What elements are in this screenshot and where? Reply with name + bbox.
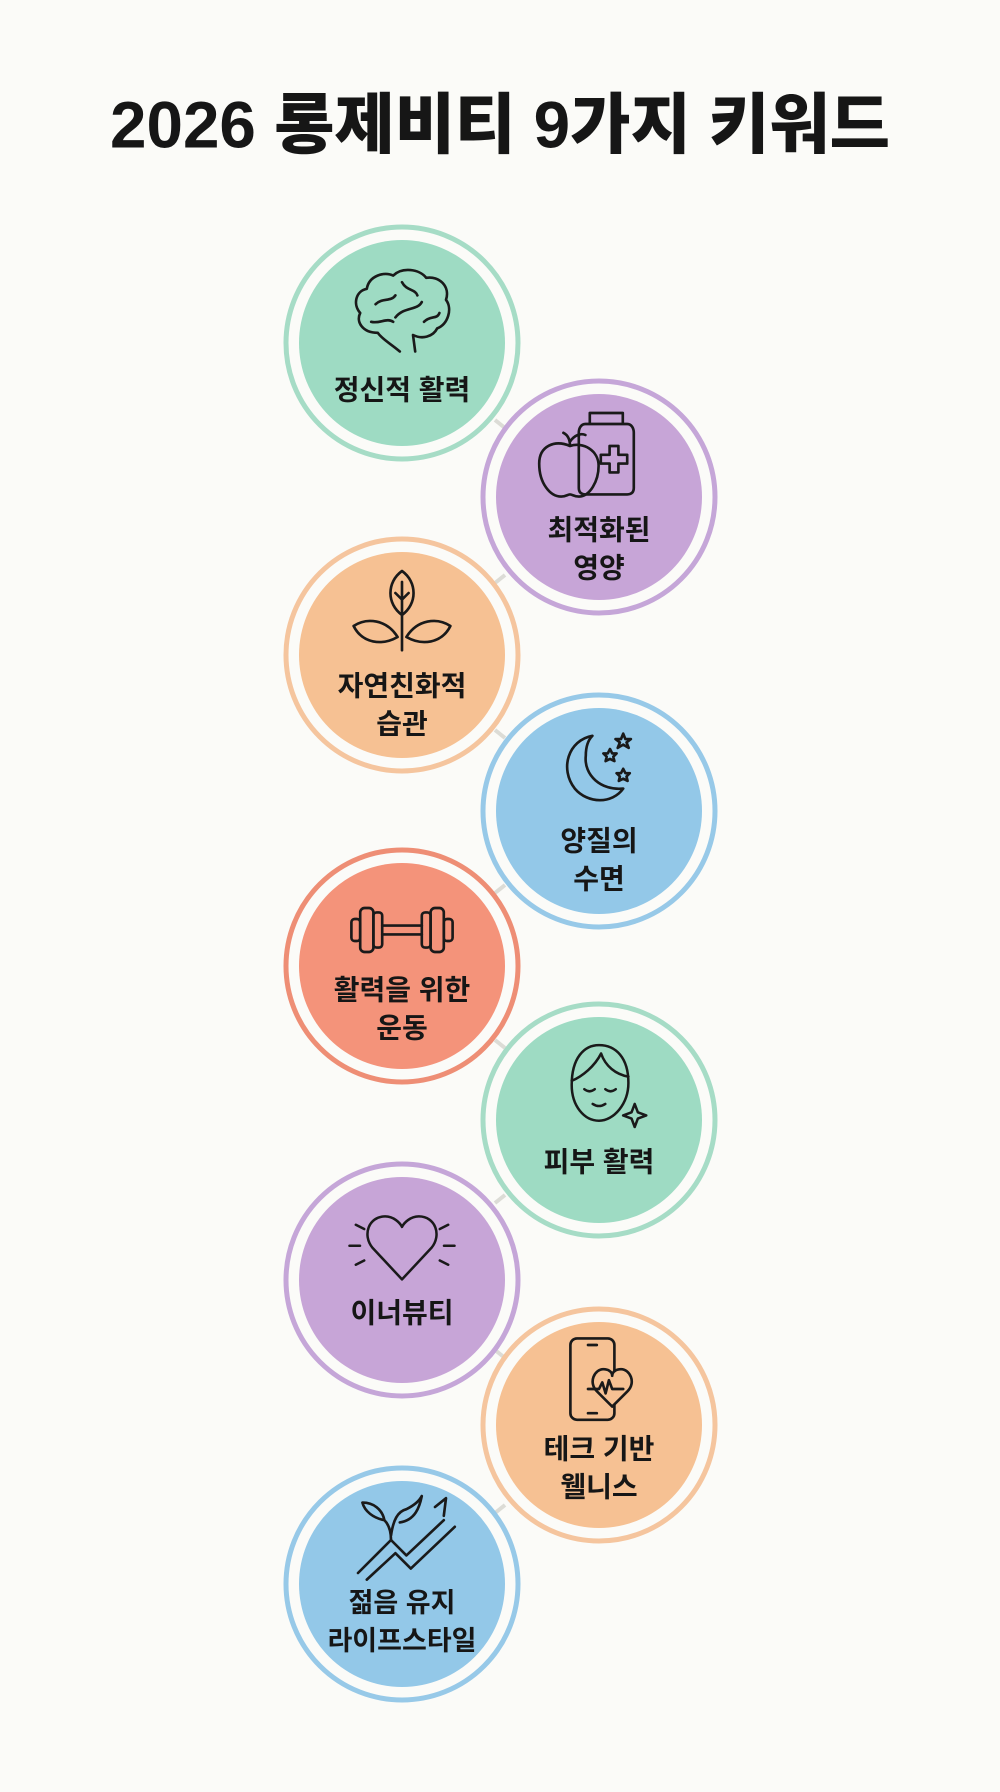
circle 9: 젊음 유지 라이프스타일: 라이프스타일 bbox=[327, 1626, 477, 1656]
label: 테크 기반 bbox=[544, 1433, 654, 1464]
icon: heart with rays bbox=[350, 1216, 454, 1279]
label: 활력을 위한 bbox=[334, 974, 470, 1005]
label: 최적화된 bbox=[547, 514, 651, 545]
connectors bbox=[495, 420, 505, 1513]
circle 3: 자연친화적 습관 bbox=[286, 539, 518, 771]
label: 정신적 활력 bbox=[334, 374, 470, 405]
circle 7: 이너뷰티 bbox=[286, 1164, 518, 1396]
icon: moon and stars bbox=[567, 734, 631, 800]
circle 2: 최적화된 영양 bbox=[483, 381, 715, 613]
icon: face with sparkle bbox=[572, 1045, 646, 1127]
icon: dumbbell bbox=[351, 908, 453, 952]
circle 3: 자연친화적 습관: 습관 bbox=[376, 708, 428, 739]
circle 8: 테크 기반 웰니스: 웰니스 bbox=[560, 1471, 638, 1502]
circle 4: 양질의 수면: 수면 bbox=[573, 863, 625, 894]
circle 2: 최적화된 영양: 영양 bbox=[573, 552, 625, 583]
circle 5: 활력을 위한 운동: 운동 bbox=[376, 1012, 428, 1043]
title: 2026 롱제비티 9가지 키워드 bbox=[110, 87, 890, 161]
label: 젊음 유지 bbox=[349, 1588, 455, 1618]
circle 6: 피부 활력 bbox=[483, 1004, 715, 1236]
icon: brain bbox=[356, 270, 449, 352]
label: 이너뷰티 bbox=[350, 1297, 454, 1328]
circle 1: 정신적 활력 bbox=[286, 227, 518, 459]
circle 9: 젊음 유지 라이프스타일 bbox=[286, 1468, 518, 1700]
label: 양질의 bbox=[560, 825, 638, 856]
icon: apple and bottle bbox=[539, 413, 634, 497]
icon: leaves bbox=[354, 571, 450, 650]
circle 4: 양질의 수면 bbox=[483, 695, 715, 927]
label: 피부 활력 bbox=[544, 1146, 654, 1177]
icon: phone with heart bbox=[570, 1338, 632, 1420]
circle 8: 테크 기반 웰니스 bbox=[483, 1309, 715, 1541]
circle 5: 활력을 위한 운동 bbox=[286, 850, 518, 1082]
label: 자연친화적 bbox=[338, 670, 466, 701]
icon: sprout with arrow bbox=[358, 1496, 455, 1580]
